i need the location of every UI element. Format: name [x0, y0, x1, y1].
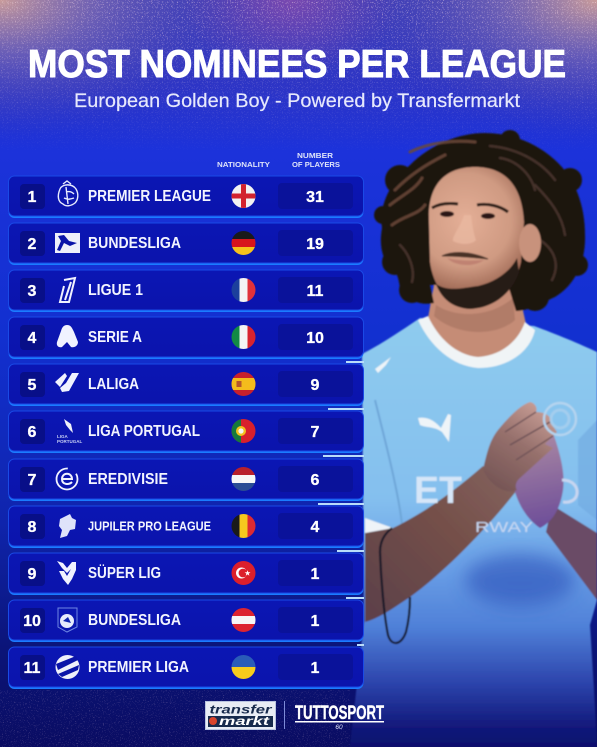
right curls: [400, 146, 565, 282]
row 11 premier liga: [8, 647, 364, 689]
column header: number of players: NUMBER: [297, 151, 334, 160]
small puma on sleeve: [375, 357, 391, 373]
brows: [432, 203, 508, 212]
row 5 laliga: [8, 364, 364, 406]
airways text: RWAY: [475, 519, 533, 536]
logo: laliga: [55, 373, 79, 392]
highlight strips between rows: [318, 361, 364, 646]
beard: [436, 258, 519, 309]
league name: PREMIER LEAGUE: [88, 188, 211, 205]
row 1 premier league: [8, 176, 364, 218]
flag: Turkey: [232, 561, 256, 585]
logo: liga portugal: LIGA: [57, 434, 68, 439]
neck: [428, 280, 526, 358]
table of leagues: [8, 176, 364, 689]
face: [429, 167, 524, 308]
eyes: [440, 211, 495, 219]
row 7 eredivisie: [8, 459, 364, 501]
crest: [544, 403, 576, 435]
league name: SÜPER LIG: [88, 565, 161, 582]
value: 11: [307, 283, 324, 300]
league name: LIGA PORTUGAL: [88, 423, 200, 440]
league name: PREMIER LIGA: [88, 659, 189, 676]
right forearm: [546, 505, 597, 600]
value: 4: [311, 519, 320, 536]
player photo illustration: [350, 130, 597, 747]
flag: Germany: [232, 231, 256, 255]
sleeve seam: [375, 400, 402, 524]
logo: serie a: [57, 325, 78, 347]
value: 19: [306, 236, 324, 253]
left arm: [365, 466, 517, 622]
flag: Italy: [232, 325, 256, 349]
finger lines: [505, 412, 553, 460]
value: 6: [311, 472, 320, 489]
hair: [374, 130, 588, 311]
flag: Austria: [232, 608, 256, 632]
logo: liga portugal: [57, 419, 82, 444]
value: 10: [306, 330, 324, 347]
logo: bundesliga: [55, 233, 80, 253]
logo: ligue 1: [60, 278, 75, 302]
logo: transfermarkt: transfer: [210, 704, 272, 716]
collar: [418, 316, 535, 368]
row 2 bundesliga: [8, 223, 364, 265]
logo: transfermarkt: [206, 702, 276, 730]
logo: super lig: [57, 561, 76, 585]
league name: BUNDESLIGA: [88, 235, 181, 252]
left curls brown: [390, 141, 475, 225]
sponsor end: [562, 480, 577, 502]
sleeve cuff: [365, 518, 393, 533]
league name: EREDIVISIE: [88, 471, 168, 488]
logo: jupiler bull: [59, 514, 76, 538]
flag: Portugal: [232, 419, 256, 443]
rank: 1: [28, 189, 37, 206]
logo: premier league lion: [58, 181, 78, 206]
nose: [453, 215, 476, 244]
bracelet: [380, 528, 410, 643]
lips: [447, 258, 484, 265]
rank: 5: [28, 377, 37, 394]
rank: 10: [23, 613, 41, 630]
logo: tuttosport: [295, 703, 384, 731]
row 3 ligue 1: [8, 270, 364, 312]
logo: ukrainian premier liga: [56, 655, 80, 679]
flag: Belgium: [232, 514, 256, 538]
column header: nationality: NATIONALITY: [217, 160, 270, 169]
league name: LIGUE 1: [88, 282, 143, 299]
moustache and mouth: [442, 253, 488, 259]
flag: France: [232, 278, 256, 302]
league name: LALIGA: [88, 376, 139, 393]
subtitle: European Golden Boy - Powered by Transfermarkt: [74, 90, 521, 112]
league name: JUPILER PRO LEAGUE: [88, 520, 211, 534]
flag: England: [232, 184, 256, 208]
sponsor text: ET: [414, 470, 462, 512]
flag: Netherlands: [232, 467, 256, 491]
logo: austrian bundesliga: [58, 608, 77, 632]
back hand: [514, 420, 564, 528]
front hand: [483, 402, 557, 491]
column header: number of players: OF PLAYERS: [292, 160, 340, 169]
league name: BUNDESLIGA: [88, 612, 181, 629]
league name: SERIE A: [88, 329, 142, 346]
rank: 2: [28, 236, 37, 253]
rank: 8: [28, 519, 37, 536]
rank: 11: [24, 660, 41, 677]
flag: Ukraine: [232, 655, 256, 679]
value: 7: [311, 424, 320, 441]
logo: transfermarkt: markt: [219, 716, 271, 728]
logo: eredivisie: [56, 468, 78, 490]
column header: number of players: [292, 151, 340, 169]
rank: 7: [28, 472, 37, 489]
shirt shadow: [465, 554, 575, 606]
neck shadow: [434, 298, 515, 332]
right sleeve: [578, 420, 597, 520]
row 9 super lig: [8, 553, 364, 595]
logo: liga portugal: PORTUGAL: [57, 439, 82, 444]
value: 1: [311, 566, 320, 583]
ear: [519, 224, 541, 262]
row 4 serie a: [8, 317, 364, 359]
logo: tuttosport: TUTTOSPORT: [295, 703, 384, 724]
puma logo: [418, 414, 451, 442]
value: 1: [311, 660, 320, 677]
row 6 liga portugal: [8, 411, 364, 453]
row 10 austrian bundesliga: [8, 600, 364, 642]
logo: tuttosport: 60: [335, 724, 343, 731]
value: 1: [311, 613, 320, 630]
value: 9: [311, 377, 320, 394]
flag: Spain: [232, 372, 256, 396]
rank: 9: [28, 566, 37, 583]
footer divider: [284, 701, 285, 729]
value: 31: [306, 189, 324, 206]
shirt: [350, 318, 597, 747]
rank: 4: [28, 330, 37, 347]
rank: 3: [28, 283, 37, 300]
row 8 jupiler pro league: [8, 506, 364, 548]
rank: 6: [28, 424, 37, 441]
